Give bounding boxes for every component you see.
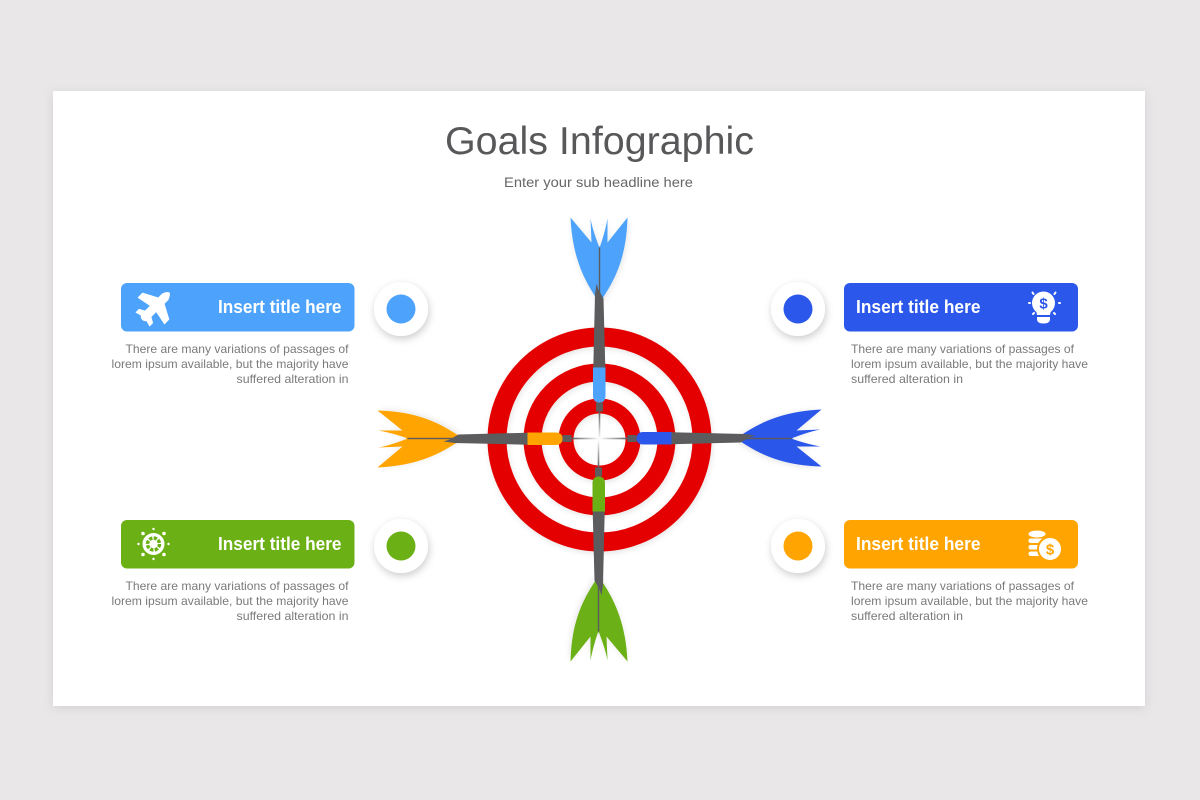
title text: Insert title here — [218, 534, 342, 554]
description: lorem ipsum available, but the majority have — [851, 357, 1088, 371]
description — [851, 579, 1088, 623]
description: suffered alteration in — [851, 372, 963, 386]
description: lorem ipsum available, but the majority have — [112, 357, 349, 371]
icon: coins: $ — [1046, 542, 1055, 558]
description: lorem ipsum available, but the majority have — [112, 594, 349, 608]
description: suffered alteration in — [236, 609, 348, 623]
subtitle: Enter your sub headline here — [504, 174, 693, 190]
target rings — [497, 337, 702, 542]
icon: light bulb with dollar — [1029, 292, 1060, 324]
description — [112, 579, 349, 623]
icon: light bulb with dollar: $ — [1039, 296, 1048, 312]
description: There are many variations of passages of — [851, 342, 1075, 356]
item: top left — [112, 279, 428, 386]
panel: white slide card — [53, 91, 1145, 706]
marker circle — [771, 282, 825, 336]
icon: ship wheel — [137, 528, 170, 560]
dart: bottom green — [570, 440, 628, 662]
dart: left orange — [378, 410, 600, 468]
description: There are many variations of passages of — [851, 579, 1075, 593]
title text: Insert title here — [856, 534, 980, 554]
dart: right blue — [600, 410, 822, 466]
icon: airplane — [129, 279, 183, 333]
dart: top light blue — [570, 218, 628, 440]
description — [851, 342, 1088, 386]
description: There are many variations of passages of — [126, 579, 349, 593]
title text: Insert title here — [856, 297, 980, 317]
title: Goals Infographic — [445, 120, 754, 163]
description: suffered alteration in — [236, 372, 348, 386]
item: bottom right — [771, 519, 1088, 623]
description: lorem ipsum available, but the majority have — [851, 594, 1088, 608]
description: There are many variations of passages of — [126, 342, 349, 356]
description — [112, 342, 349, 386]
title text: Insert title here — [218, 297, 342, 317]
item: top right — [771, 282, 1088, 386]
marker circle — [771, 519, 825, 573]
marker circle — [374, 519, 428, 573]
icon: coins — [1028, 530, 1062, 561]
marker circle — [374, 282, 428, 336]
description: suffered alteration in — [851, 609, 963, 623]
item: bottom left — [112, 519, 428, 623]
